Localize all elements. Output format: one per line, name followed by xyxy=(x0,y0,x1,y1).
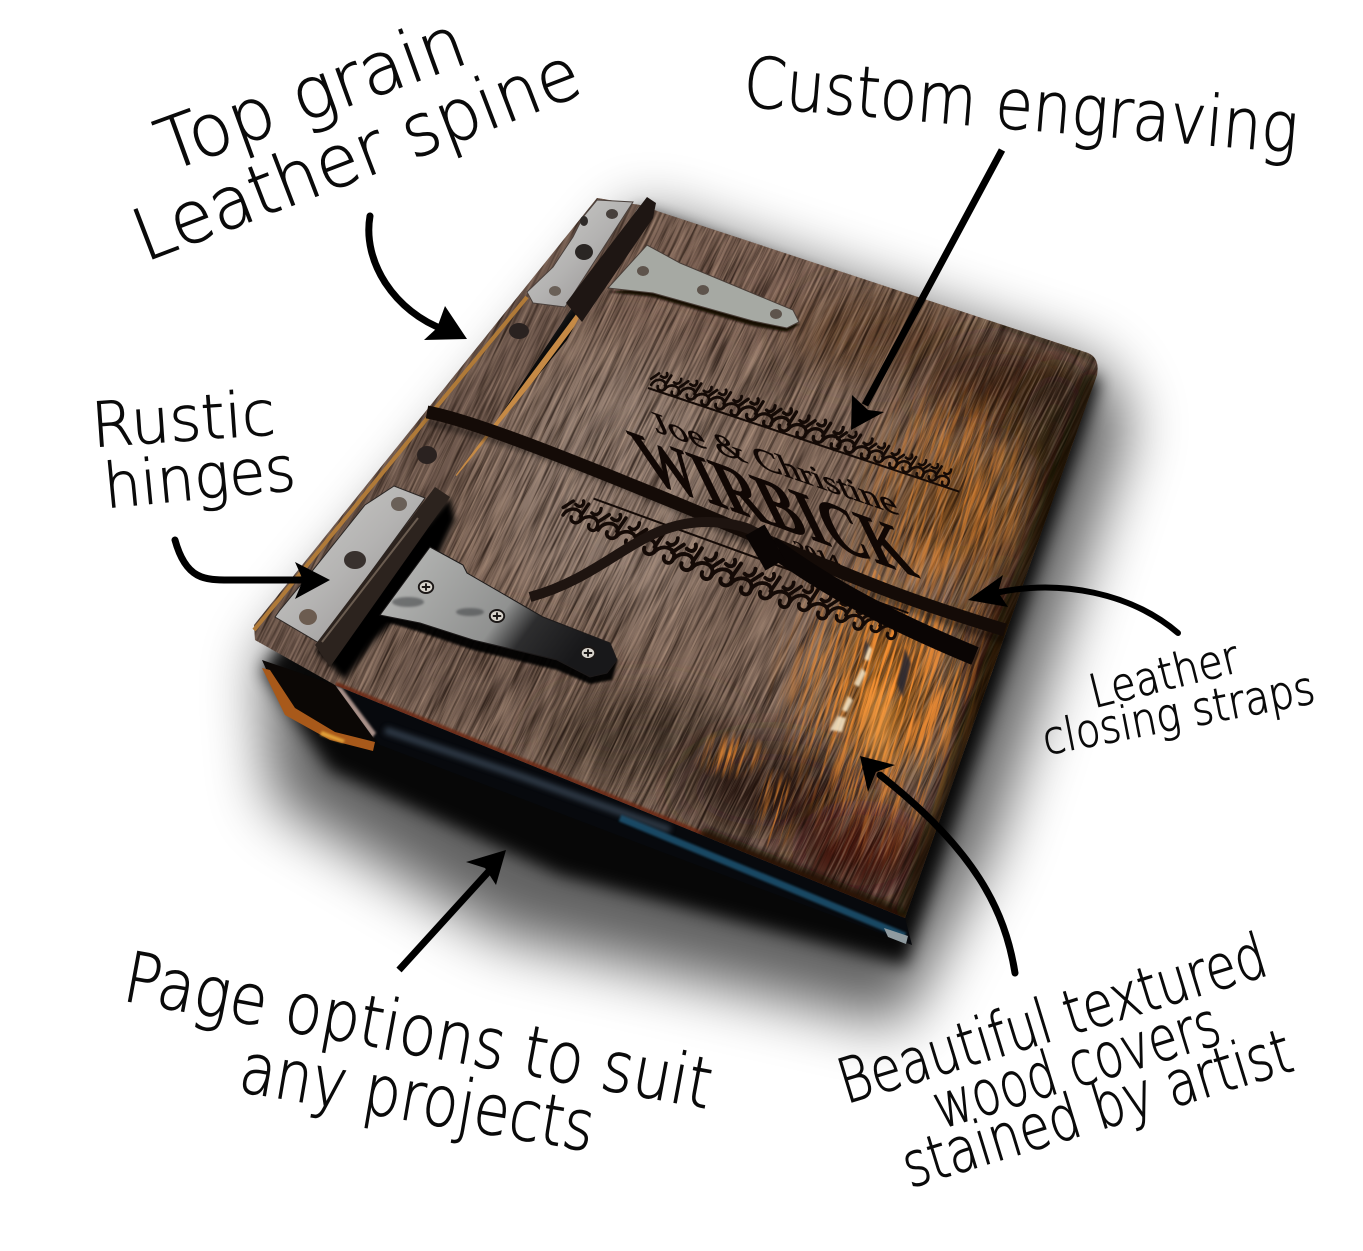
knot xyxy=(755,530,775,565)
arrow: to hinges xyxy=(175,540,330,599)
engraved surname: WIRBICK xyxy=(616,412,929,595)
leather spine strip xyxy=(254,198,640,685)
upper hinge shadow xyxy=(608,286,800,332)
barrel highlight xyxy=(322,518,418,642)
upper hinge xyxy=(527,197,800,332)
wood cover xyxy=(335,205,1098,918)
label: leather closing straps: Leather xyxy=(1084,629,1244,719)
arrow: to wood cover xyxy=(860,756,1015,973)
dark corner fold xyxy=(262,660,375,740)
label: page options: Page options to suit xyxy=(118,936,719,1125)
arrow: to engraving xyxy=(851,150,1002,430)
strap shadow xyxy=(428,422,1005,640)
label: wood covers xyxy=(829,919,1301,1202)
pale page wedge xyxy=(333,685,376,738)
cover base colour xyxy=(320,195,1110,930)
wood grain streaks xyxy=(336,205,1098,916)
spine outer edge xyxy=(254,297,527,630)
engraved date: 2014 xyxy=(790,537,844,573)
orange leather corner xyxy=(262,668,375,751)
upper hinge tail xyxy=(608,245,799,328)
lower hinge cast shadow xyxy=(315,497,455,680)
album page block xyxy=(335,684,912,945)
blue page edge streak right xyxy=(620,818,905,936)
label: rustic hinges xyxy=(89,376,299,523)
label: wood covers: wood covers xyxy=(924,987,1228,1143)
faint page edge streak left xyxy=(385,730,670,830)
spine screw upper xyxy=(509,323,529,339)
label: page options: any projects xyxy=(234,1027,601,1168)
upper hinge screws xyxy=(549,209,782,319)
lower hinge xyxy=(275,486,618,684)
main strap xyxy=(427,412,1005,630)
upper hinge plate xyxy=(527,200,633,307)
tail shadow xyxy=(380,610,618,684)
leather closing straps xyxy=(427,412,1005,656)
label: leather closing straps: closing straps xyxy=(1038,660,1319,766)
lower hinge screws xyxy=(299,497,595,659)
engraved first names: Joe & Christine xyxy=(644,403,904,523)
tail mottling xyxy=(392,597,484,616)
edge darkening xyxy=(335,325,1098,918)
spine screw lower xyxy=(417,446,437,464)
hanging strap end xyxy=(770,545,975,656)
spine groove dark line xyxy=(463,318,585,480)
bright corner highlight xyxy=(320,731,345,743)
upper hinge barrel xyxy=(566,197,656,322)
illustrated wooden album xyxy=(252,55,1296,976)
arrow: to leather straps xyxy=(968,575,1178,633)
arrow: to leather spine xyxy=(369,216,467,340)
label: rustic hinges: hinges xyxy=(100,432,299,523)
lower hinge plate xyxy=(275,486,425,643)
spine groove orange line xyxy=(458,314,580,477)
book drop shadow xyxy=(262,210,1130,1025)
label: top grain leather spine: Leather spine xyxy=(121,30,592,278)
lower hinge barrel xyxy=(315,487,450,667)
label: rustic hinges: Rustic xyxy=(89,376,278,462)
page corner tip xyxy=(884,928,908,944)
bottom ornament band xyxy=(557,490,908,649)
spine grain xyxy=(254,198,640,684)
bright worn patch xyxy=(830,640,911,763)
strap tie loop xyxy=(530,522,775,597)
cover colour variation xyxy=(370,230,1093,900)
arrow: to pages xyxy=(399,850,506,970)
laser engraving xyxy=(557,364,967,649)
top ornament band xyxy=(648,364,967,492)
label: top grain leather spine: Top grain xyxy=(145,0,476,188)
lower hinge tail xyxy=(380,547,617,677)
